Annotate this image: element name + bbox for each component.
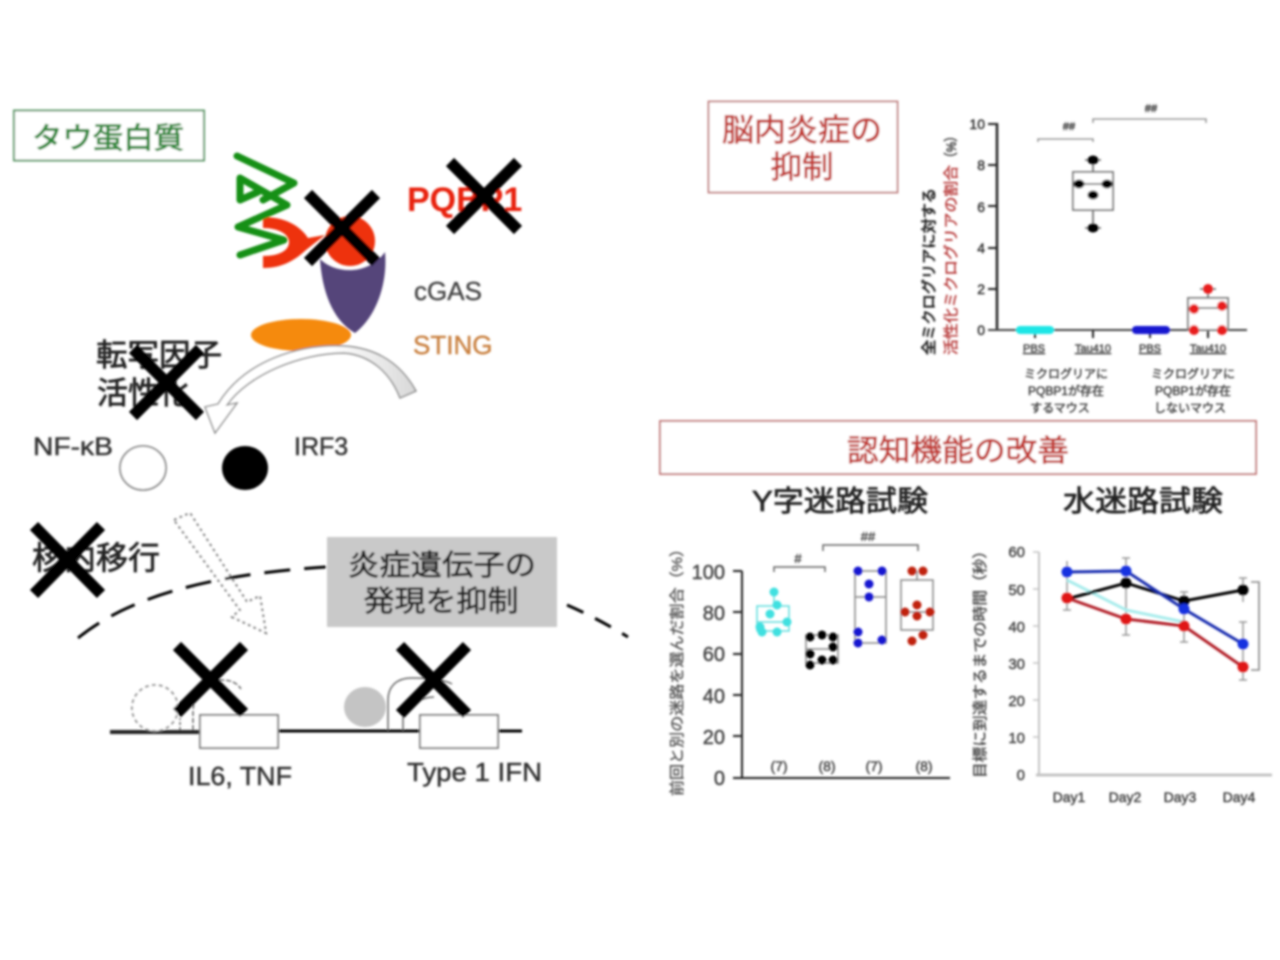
chart: activated microglia ratio: ミクログリアに xyxy=(1024,367,1108,381)
blue series xyxy=(1067,571,1243,644)
sample sizes: (8) xyxy=(915,758,933,774)
nuclear membrane dashed curve xyxy=(78,567,628,638)
icon: IRF3 circle xyxy=(222,446,268,490)
text: nuclear translocation: 核内移行 xyxy=(32,540,160,576)
chart: activated microglia ratio: ミクログリアに xyxy=(1151,367,1235,381)
text: transcription factor activation: 転写因子 xyxy=(96,338,222,373)
chart: water maze line chart: 50 xyxy=(1008,582,1025,599)
group labels xyxy=(1023,343,1226,355)
icon: cGAS purple shape xyxy=(320,252,385,333)
icon: STING orange ellipse xyxy=(251,319,351,351)
red series xyxy=(1067,598,1243,667)
label: PQBP1: PQBP1 xyxy=(407,181,522,219)
label: cGAS: cGAS xyxy=(414,276,482,306)
group labels: PBS xyxy=(1023,343,1045,355)
day labels: Day3 xyxy=(1164,789,1197,805)
cyan dots xyxy=(756,588,792,636)
label: STING: STING xyxy=(413,330,492,360)
day labels: Day1 xyxy=(1053,789,1086,805)
black dots xyxy=(1074,156,1112,232)
panel: cognitive function improvement: 認知機能の改善 xyxy=(847,435,1069,468)
arrow: curved activation arrow xyxy=(205,346,416,433)
axis labels: 0 xyxy=(977,322,985,338)
red dots xyxy=(900,566,934,646)
label: Type 1 IFN: Type 1 IFN xyxy=(407,757,542,787)
chart: activated microglia ratio: 活性化ミクログリアの割合 xyxy=(943,165,960,355)
chart: activated microglia ratio: するマウス xyxy=(1030,401,1090,415)
blue dots xyxy=(854,566,886,648)
brackets xyxy=(1038,119,1206,142)
boxes xyxy=(757,571,933,663)
black dots xyxy=(806,630,838,670)
boxes xyxy=(1073,160,1228,330)
heading: Y-maze test: Y字迷路試験 xyxy=(752,485,928,518)
chart: Y-maze boxplot: # xyxy=(794,551,802,566)
sample sizes: (7) xyxy=(865,758,883,774)
red dots xyxy=(1189,284,1227,335)
text: activation: 活性化 xyxy=(97,376,190,411)
chart: activated microglia ratio: ## xyxy=(1063,121,1076,133)
chart: Y-maze boxplot: 0 xyxy=(714,768,725,790)
chart: activated microglia ratio: PQBP1が存在 xyxy=(1155,383,1231,398)
chart: activated microglia ratio xyxy=(921,103,1247,415)
sample sizes xyxy=(770,758,933,774)
panel: tau protein label: タウ蛋白質 xyxy=(32,122,184,155)
icon: cross marks xyxy=(34,162,518,714)
chart: water maze line chart: 0 xyxy=(1017,767,1025,784)
panel: tau protein label xyxy=(14,110,204,160)
y axis title: 前回と別の迷路を選んだ割合（%） xyxy=(669,541,686,796)
heading: water maze test: 水迷路試験 xyxy=(1063,485,1223,518)
arrow: dotted nuclear translocation arrow xyxy=(174,513,266,633)
y axis title: 全ミクログリアに対する xyxy=(921,188,938,355)
day labels xyxy=(1053,789,1256,805)
panel: suppression of inflammatory gene expression: 発現を抑制 xyxy=(364,585,518,618)
panel: suppression of brain inflammation: 脳内炎症の xyxy=(722,113,882,148)
day labels: Day4 xyxy=(1223,789,1256,805)
axis labels xyxy=(969,116,985,338)
chart: Y-maze boxplot xyxy=(669,529,950,796)
sample sizes: (7) xyxy=(770,758,788,774)
chart: Y-maze boxplot: 40 xyxy=(703,686,725,708)
chart: Y-maze boxplot: 80 xyxy=(703,603,725,625)
chart: Y-maze boxplot: ## xyxy=(861,529,876,544)
chart: activated microglia ratio: ## xyxy=(1145,103,1158,115)
chart: Y-maze boxplot: 20 xyxy=(703,727,725,749)
label: IRF3: IRF3 xyxy=(294,433,348,461)
sample sizes: (8) xyxy=(818,758,836,774)
day labels: Day2 xyxy=(1109,789,1142,805)
panel: cognitive function improvement xyxy=(660,421,1256,474)
axis labels: 6 xyxy=(977,199,985,215)
chart: water maze line chart xyxy=(972,543,1272,805)
icon: tau protein green zigzag xyxy=(237,156,294,255)
icon: NF-kB circle xyxy=(120,446,166,490)
cyan series xyxy=(1067,580,1184,622)
label: NF-kB: NF-κB xyxy=(33,433,113,461)
chart: water maze line chart: 10 xyxy=(1008,730,1025,747)
brackets xyxy=(774,545,918,572)
error bars xyxy=(1063,558,1247,680)
series markers xyxy=(1062,566,1248,672)
chart: Y-maze boxplot: 100 xyxy=(692,562,725,584)
bracket xyxy=(1251,582,1259,670)
axis labels: 4 xyxy=(977,240,985,256)
group labels: Tau410 xyxy=(1075,343,1111,355)
axis labels: 8 xyxy=(977,157,985,173)
chart: activated microglia ratio: （%） xyxy=(943,130,959,164)
panel: suppression of inflammatory gene expression: 炎症遺伝子の xyxy=(348,549,536,582)
axes xyxy=(988,123,1247,338)
chart: water maze line chart: 30 xyxy=(1008,656,1025,673)
chart: activated microglia ratio: しないマウス xyxy=(1154,401,1226,415)
PBS dots xyxy=(1016,326,1054,334)
y axis title: 目標に到達するまでの時間（秒） xyxy=(972,543,989,778)
chart: water maze line chart: 40 xyxy=(1008,619,1025,636)
panel: suppression of inflammatory gene expression xyxy=(327,537,557,627)
black series xyxy=(1067,583,1243,601)
chart: water maze line chart: 20 xyxy=(1008,693,1025,710)
chart: Y-maze boxplot: 60 xyxy=(703,644,725,666)
chart: activated microglia ratio: PQBP1が存在 xyxy=(1028,383,1104,398)
panel: suppression of brain inflammation xyxy=(708,102,898,192)
icon: PQBP1 red shape xyxy=(263,216,375,268)
group labels: Tau410 xyxy=(1190,343,1226,355)
axis labels: 10 xyxy=(969,116,985,132)
diagram: DNA with gene boxes xyxy=(110,678,522,748)
panel: suppression of brain inflammation: 抑制 xyxy=(770,150,834,185)
axis labels: 2 xyxy=(977,281,985,297)
group labels: PBS xyxy=(1139,343,1161,355)
chart: water maze line chart: 60 xyxy=(1008,544,1025,561)
label: IL6, TNF: IL6, TNF xyxy=(188,761,292,791)
